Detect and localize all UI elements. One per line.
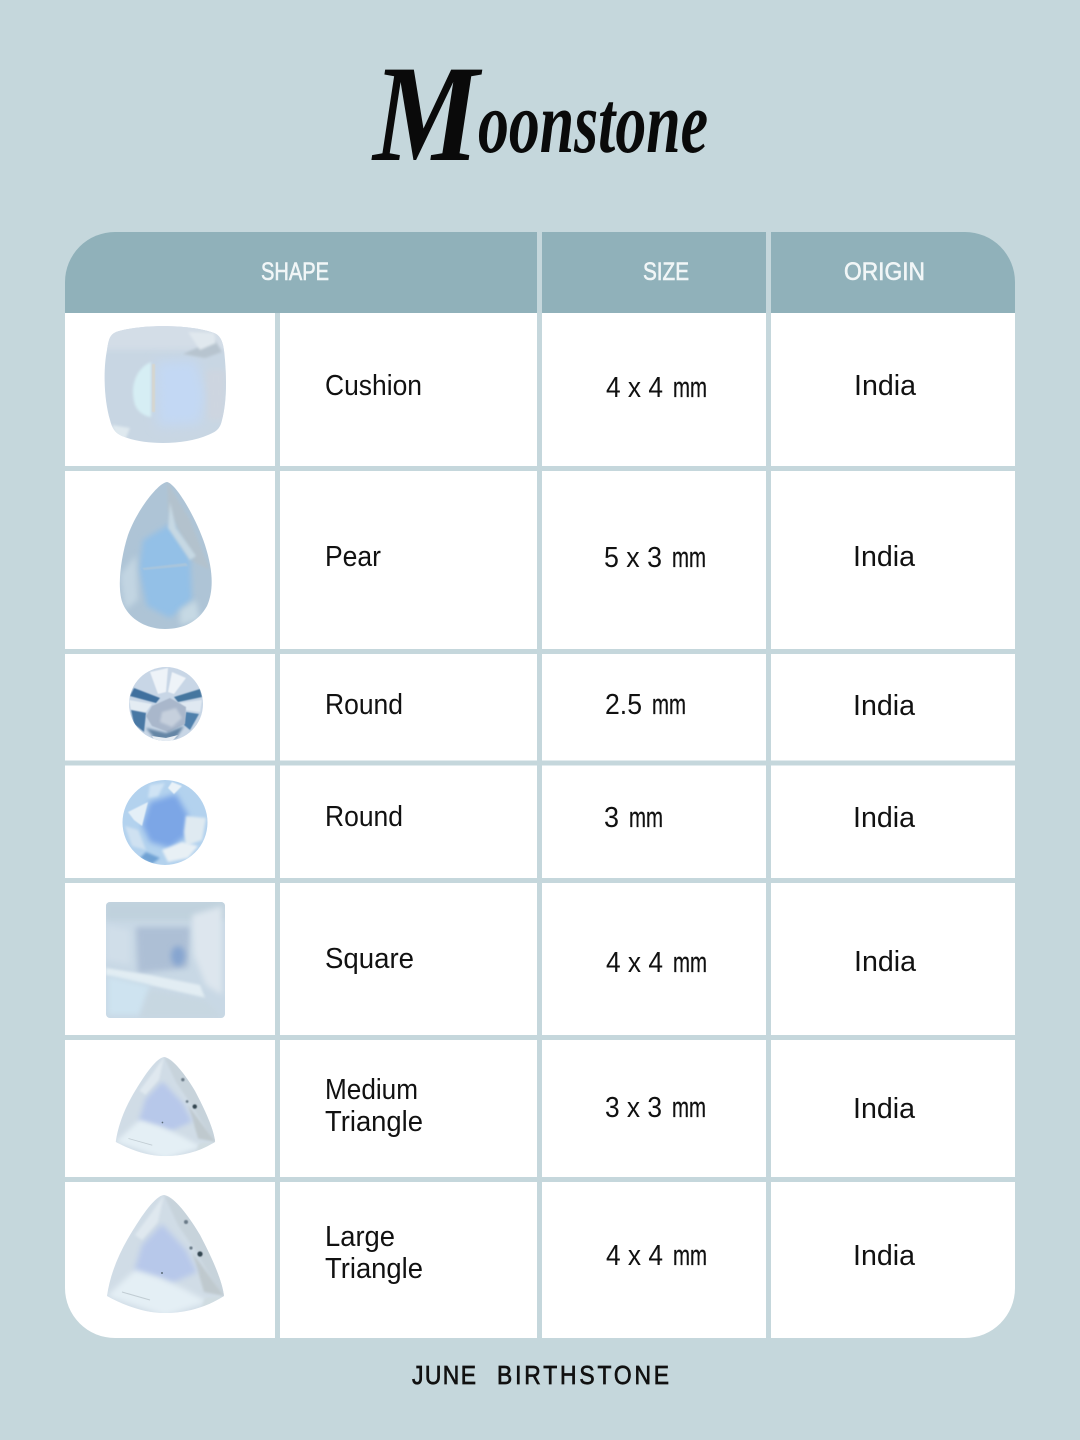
label: round: Round [325, 801, 403, 833]
size: 3 x 3 mm: 3 x 3 [605, 1092, 662, 1124]
title: oonstone [478, 75, 708, 172]
size: 4 x 4 mm: 4 x 4 [606, 947, 663, 979]
row: large triangle: mm [673, 1240, 707, 1272]
row: cushion: mm [673, 372, 707, 404]
origin: India: India [853, 802, 916, 834]
row: square [104, 900, 917, 1020]
origin: India: India [853, 541, 916, 573]
row: cushion [104, 326, 916, 443]
row: large triangle [100, 1190, 916, 1320]
row: round 3 mm [120, 778, 916, 870]
label: medium triangle: Medium [325, 1074, 418, 1106]
heading: size: SIZE [643, 258, 689, 286]
gem: cushion [104, 326, 226, 443]
label: medium triangle: Triangle [325, 1106, 423, 1138]
size: 3 mm: 3 [604, 802, 619, 834]
row: medium triangle: mm [672, 1092, 706, 1124]
table header band [65, 232, 1015, 313]
label: large triangle: Large [325, 1221, 395, 1253]
origin: India: India [853, 1093, 916, 1125]
gem: square [104, 900, 227, 1020]
footer: june birthstone: JUNE [412, 1362, 476, 1390]
label: large triangle: Triangle [325, 1253, 423, 1285]
origin: India: India [854, 946, 917, 978]
origin: India: India [853, 1240, 916, 1272]
row: pear [110, 478, 916, 633]
size: 4 x 4 mm: 4 x 4 [606, 372, 663, 404]
row: square: mm [673, 947, 707, 979]
title: M [371, 37, 483, 190]
label: pear: Pear [325, 541, 381, 573]
gem: round small [129, 667, 203, 741]
gem: pear [120, 482, 212, 629]
size: 5 x 3 mm: 5 x 3 [604, 542, 662, 574]
row: round 2.5 mm [129, 667, 916, 741]
size: 4 x 4 mm: 4 x 4 [606, 1240, 663, 1272]
label: round: Round [325, 689, 403, 721]
row: medium triangle [110, 1053, 916, 1162]
table card [65, 232, 1015, 1338]
gem: medium triangle [110, 1053, 224, 1162]
size: 2.5 mm: 2.5 [605, 689, 642, 721]
footer: june birthstone: BIRTHSTONE [497, 1362, 669, 1390]
origin: India: India [853, 690, 916, 722]
gem: round blue [122, 780, 208, 865]
origin: India: India [854, 370, 917, 402]
row: round 3 mm: mm [629, 802, 663, 834]
row: round 2.5 mm: mm [652, 689, 686, 721]
heading: origin: ORIGIN [844, 258, 925, 286]
table body [65, 313, 1015, 1338]
label: cushion: Cushion [325, 370, 422, 402]
heading: shape: SHAPE [261, 258, 329, 286]
row: pear: mm [672, 542, 706, 574]
gem: large triangle [100, 1190, 235, 1320]
label: square: Square [325, 943, 414, 975]
